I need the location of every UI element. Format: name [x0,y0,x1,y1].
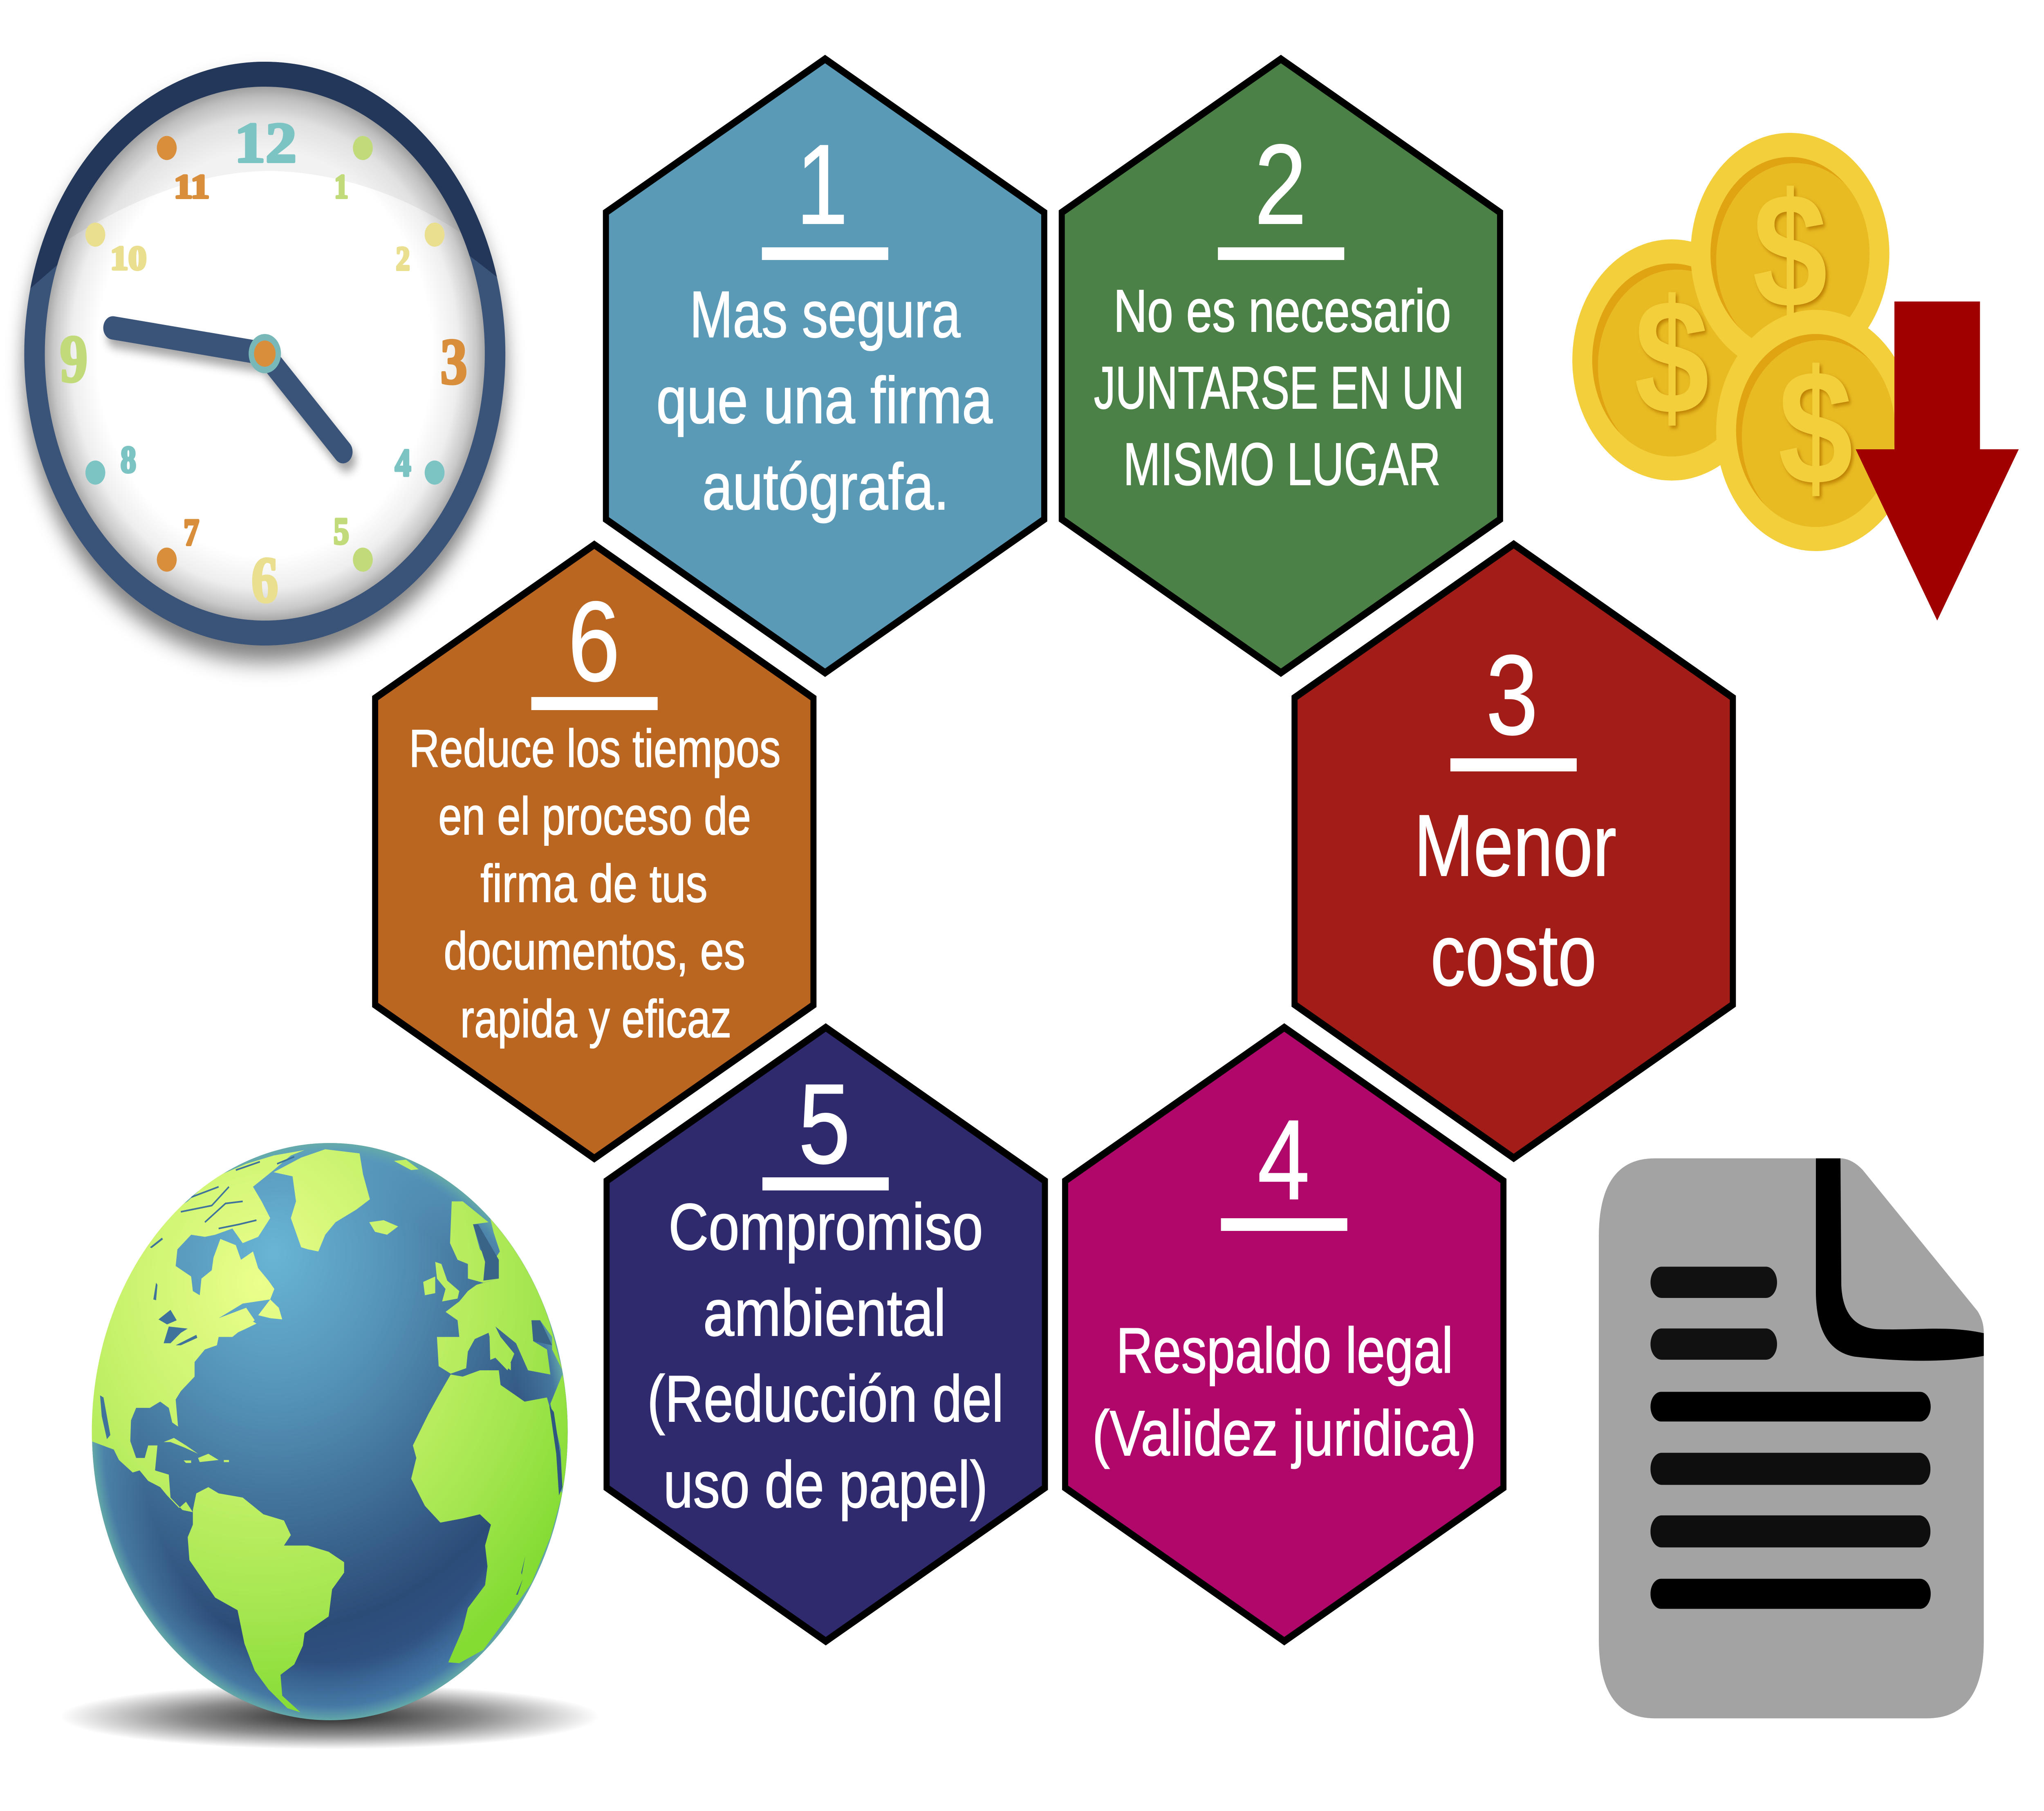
coin: bottom: $ [1778,336,1853,519]
text: hexagon 5 body: ambiental [703,1276,946,1350]
text: hexagon 4 body [1092,1315,1476,1469]
icon: document [1599,1158,1984,1718]
text: hexagon 6 body: Reduce los tiempos [409,719,781,778]
clock numerals: 7 [184,512,199,554]
text: hexagon 3 body: costo [1430,906,1597,1004]
document fold [1816,1158,1984,1361]
panel: hexagon 3 [1295,544,1733,1158]
clock hour dots [85,136,444,572]
text: hexagon 1 body: Mas segura [690,278,961,351]
panel: hexagon 1: 1 [796,121,848,248]
text: hexagon 5 body: uso de papel) [663,1448,988,1522]
clock numerals: 2 [396,240,410,278]
coin: left: $ [1634,265,1709,448]
clock numerals: 5 [334,511,349,552]
panel: hexagon 2 [1062,59,1500,673]
text: hexagon 1 body [656,278,993,524]
panel: hexagon 1 [606,59,1044,673]
text: hexagon 5 body: (Reducción del [647,1362,1004,1436]
clock numerals: 9 [60,321,87,396]
globe ground shadow [61,1684,599,1749]
panel: hexagon 4 [1065,1027,1504,1641]
text: hexagon 6 body: en el proceso de [438,787,751,846]
panel: hexagon 5 [607,1027,1045,1641]
text: hexagon 6 body: firma de tus [480,854,708,913]
clock numerals: 11 [174,168,210,206]
text: hexagon 6 body: documentos, es [444,921,745,981]
document text lines [1650,1266,1931,1609]
clock numerals [60,111,467,616]
panel: hexagon 6: 6 [568,578,620,705]
panel: hexagon 6 [375,545,814,1159]
panel: hexagon 3: 3 [1486,631,1538,758]
arrow: cost going down [1856,302,2019,621]
text: hexagon 5 body [647,1190,1004,1522]
clock numerals: 1 [334,168,348,206]
icon: earth globe [61,1143,599,1749]
text: hexagon 1 body: autógrafa. [702,450,949,524]
coin: top: $ [1753,159,1827,342]
coin: bottom [1716,310,1894,551]
panel: hexagon 2: 2 [1255,121,1307,248]
panel: hexagon 5: 5 [798,1060,850,1187]
text: hexagon 2 body [1094,277,1464,498]
icon: gold coins [1572,133,1915,551]
text: hexagon 2 body: MISMO LUGAR [1123,430,1441,498]
clock numerals: 6 [251,543,278,616]
coin: top [1690,133,1889,374]
text: hexagon 3 body [1414,796,1616,1004]
text: hexagon 6 body [409,719,781,1049]
clock numerals: 8 [121,439,136,481]
clock numerals: 12 [234,111,297,175]
text: hexagon 6 body: rapida y eficaz [460,989,731,1049]
clock numerals: 10 [110,240,146,277]
coin: left [1572,240,1737,481]
clock numerals: 4 [395,441,411,484]
panel: hexagon 4: 4 [1257,1096,1310,1223]
text: hexagon 2 body: JUNTARSE EN UN [1094,354,1464,421]
text: hexagon 4 body: (Validez juridica) [1092,1398,1476,1469]
text: hexagon 2 body: No es necesario [1114,277,1451,345]
text: hexagon 3 body: Menor [1414,796,1616,894]
text: hexagon 5 body: Compromiso [668,1190,983,1264]
clock numerals: 3 [440,325,467,398]
clock hands [113,328,346,460]
text: hexagon 4 body: Respaldo legal [1116,1315,1453,1386]
icon: wall clock [24,41,505,662]
text: hexagon 1 body: que una firma [656,364,993,437]
